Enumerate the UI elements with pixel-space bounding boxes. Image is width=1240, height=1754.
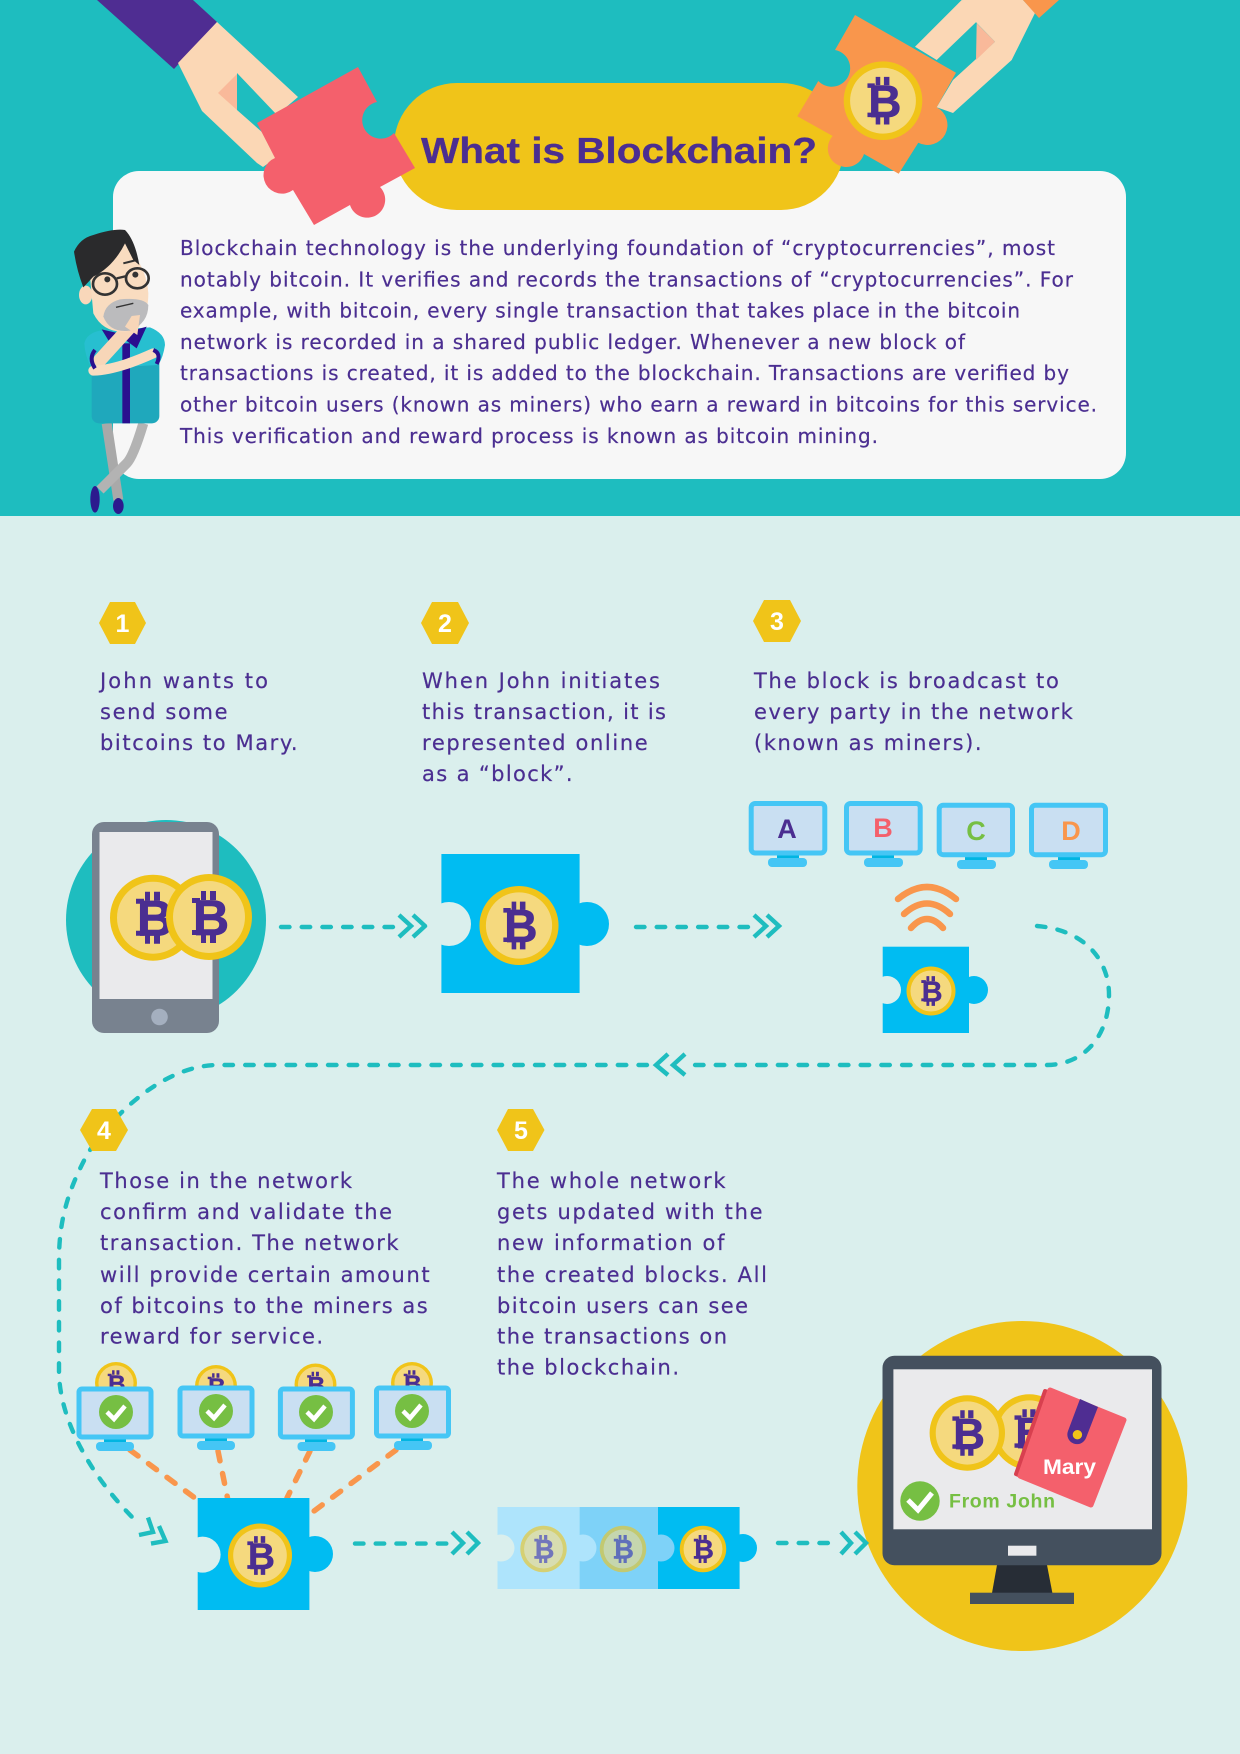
intro paragraph: network is recorded in a shared public ledger. Whenever a new block of bbox=[180, 330, 966, 354]
step 4 text: will provide certain amount bbox=[100, 1263, 430, 1287]
step 5 text: new information of bbox=[497, 1231, 725, 1255]
arrow: chain to monitor bbox=[778, 1532, 866, 1554]
monitor A bbox=[751, 804, 825, 867]
illustration: large block puzzle: B bbox=[248, 1535, 275, 1577]
monitor D bbox=[1032, 805, 1106, 869]
illustration: small block puzzle: B bbox=[922, 976, 942, 1008]
character: thinking man bbox=[74, 230, 165, 514]
illustration: block puzzle bbox=[427, 854, 609, 993]
monitor C bbox=[939, 805, 1012, 869]
intro paragraph: other bitcoin users (known as miners) who earn a reward in bitcoins for this service. bbox=[180, 392, 1097, 416]
step 4 text: of bitcoins to the miners as bbox=[100, 1294, 428, 1318]
wallet bbox=[1016, 1390, 1124, 1505]
title pill bbox=[394, 83, 844, 210]
panel: intro text bbox=[113, 171, 1126, 479]
step 2 text: When John initiates bbox=[422, 669, 660, 693]
step 4 text: Those in the network bbox=[99, 1169, 353, 1193]
step 3 text bbox=[753, 669, 1074, 755]
arrow: phone to block bbox=[281, 915, 425, 937]
step 1 text: John wants to bbox=[98, 669, 268, 693]
step 5 badge: 5 bbox=[514, 1117, 528, 1145]
illustration: desktop monitor with wallet: B bbox=[953, 1410, 985, 1459]
step 4 badge: 4 bbox=[97, 1117, 111, 1145]
illustration: chain of blocks: B bbox=[535, 1535, 554, 1565]
step 3 text: The block is broadcast to bbox=[753, 669, 1059, 693]
step 5 text: The whole network bbox=[496, 1169, 726, 1193]
miner 2 validated bbox=[180, 1365, 252, 1450]
monitor B bbox=[846, 804, 920, 867]
step 1 text: send some bbox=[100, 700, 228, 724]
step 4 badge bbox=[80, 1109, 128, 1151]
intro paragraph: This verification and reward process is known as bitcoin mining. bbox=[179, 424, 878, 448]
step 3 badge bbox=[753, 600, 801, 642]
illustration: phone with coins: B bbox=[137, 891, 173, 947]
step 4 text: confirm and validate the bbox=[100, 1200, 392, 1224]
illustration: left hand bbox=[97, 0, 298, 167]
intro paragraph: notably bitcoin. It verifies and records the transactions of “cryptocurrencies”. For bbox=[180, 267, 1074, 291]
step 5 text bbox=[496, 1169, 767, 1380]
step 5 text: bitcoin users can see bbox=[497, 1294, 748, 1318]
title: What is Blockchain? bbox=[421, 130, 817, 171]
illustration: chain of blocks: B bbox=[694, 1535, 714, 1565]
step 3 text: (known as miners). bbox=[754, 731, 982, 755]
illustration: right hand palm bbox=[937, 0, 1059, 113]
step 4 text: transaction. The network bbox=[100, 1231, 399, 1255]
illustration: small block puzzle bbox=[873, 947, 988, 1033]
monitor C: C bbox=[966, 816, 986, 846]
icon: check mark bbox=[900, 1481, 940, 1521]
miner 3 validated bbox=[280, 1364, 352, 1451]
illustration: desktop monitor with wallet bbox=[857, 1321, 1187, 1651]
connectors: miners to block bbox=[130, 1450, 396, 1514]
step 1 text bbox=[98, 669, 298, 755]
illustration: large block puzzle bbox=[185, 1498, 333, 1610]
intro paragraph: Blockchain technology is the underlying foundation of “cryptocurrencies”, most bbox=[180, 236, 1055, 260]
monitor A: A bbox=[777, 814, 797, 844]
monitor B: B bbox=[873, 813, 893, 843]
arrow: block to network bbox=[636, 915, 779, 937]
illustration: right hand finger bbox=[915, 0, 978, 60]
illustration: phone with coins: B bbox=[193, 890, 229, 946]
step 3 text: every party in the network bbox=[754, 700, 1074, 724]
miner 3 validated: B bbox=[308, 1372, 325, 1399]
step 4 text: reward for service. bbox=[100, 1325, 323, 1349]
header band bbox=[0, 0, 1240, 516]
miner 4 validated: B bbox=[404, 1371, 422, 1398]
illustration: orange puzzle piece with coin: B bbox=[868, 76, 901, 127]
intro paragraph: transactions is created, it is added to the blockchain. Transactions are verified by bbox=[180, 361, 1069, 385]
arrow: block to chain bbox=[355, 1532, 478, 1554]
step 5 text: the transactions on bbox=[497, 1325, 727, 1349]
illustration: red puzzle piece bbox=[257, 67, 415, 225]
intro paragraph bbox=[179, 236, 1097, 448]
step 1 text: bitcoins to Mary. bbox=[100, 731, 298, 755]
icon: wifi signal bbox=[898, 887, 956, 928]
illustration: desktop monitor with wallet: B bbox=[1015, 1409, 1047, 1458]
step 5 text: the blockchain. bbox=[497, 1356, 679, 1380]
miner 1 validated: B bbox=[108, 1371, 126, 1398]
step 2 badge: 2 bbox=[438, 610, 452, 638]
illustration: orange puzzle piece with coin bbox=[797, 15, 956, 174]
step 3 badge: 3 bbox=[770, 608, 784, 636]
miner 2 validated: B bbox=[208, 1374, 226, 1401]
step 5 badge bbox=[497, 1109, 544, 1151]
monitor D: D bbox=[1061, 816, 1081, 846]
step 2 text: this transaction, it is bbox=[422, 700, 666, 724]
label: from John: From John bbox=[949, 1491, 1055, 1513]
step 5 text: gets updated with the bbox=[497, 1200, 762, 1224]
step 2 text: as a “block”. bbox=[422, 762, 573, 786]
miner 1 validated bbox=[79, 1362, 151, 1451]
step 2 text bbox=[422, 669, 666, 786]
illustration: chain of blocks: B bbox=[614, 1535, 634, 1565]
arrow: long curved path to step 4 bbox=[59, 926, 1109, 1544]
illustration: chain of blocks bbox=[488, 1507, 757, 1589]
step 5 text: the created blocks. All bbox=[497, 1263, 767, 1287]
step 2 text: represented online bbox=[422, 731, 648, 755]
step 1 badge bbox=[99, 602, 146, 644]
step 4 text bbox=[99, 1169, 430, 1349]
step 2 badge bbox=[421, 602, 469, 644]
wallet: Mary bbox=[1043, 1456, 1096, 1479]
illustration: phone with coins bbox=[66, 820, 266, 1033]
miner 4 validated bbox=[376, 1362, 448, 1450]
intro paragraph: example, with bitcoin, every single transaction that takes place in the bitcoin bbox=[180, 299, 1020, 323]
illustration: block puzzle: B bbox=[504, 900, 537, 952]
step 1 badge: 1 bbox=[116, 610, 130, 638]
